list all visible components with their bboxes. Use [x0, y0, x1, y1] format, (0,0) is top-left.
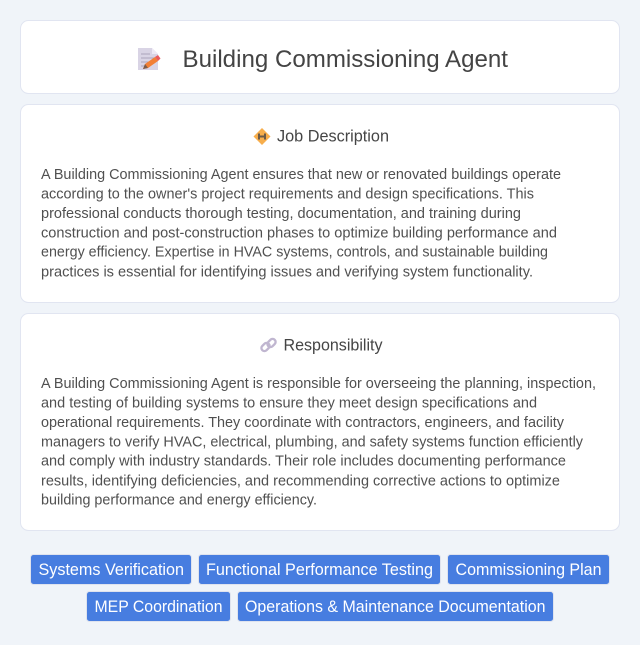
tag: MEP Coordination	[86, 592, 230, 622]
icon: chain link	[260, 338, 277, 352]
text block: job description: A Building Commissioning Agent ensures that new or renovated buildings operate	[41, 167, 561, 183]
tag: Functional Performance Testing	[198, 554, 440, 584]
text block: responsibility: managers to verify HVAC, electrical, plumbing, and safety systems function efficiently	[41, 434, 584, 450]
tag: Commissioning Plan: Commissioning Plan	[456, 561, 602, 579]
heading: responsibility: Responsibility	[284, 337, 383, 355]
text block: responsibility: building performance and energy efficiency.	[41, 492, 317, 508]
text block: responsibility	[41, 376, 596, 508]
panel: responsibility	[20, 314, 620, 530]
heading: job description: Job Description	[277, 128, 389, 146]
text block: responsibility: and comply with industry standards. Their role includes documenting performance	[41, 454, 566, 470]
icon: document with pencil	[138, 48, 160, 70]
panel: title card	[20, 20, 620, 94]
tag: Operations & Maintenance Documentation	[238, 592, 554, 622]
tag: Commissioning Plan	[448, 554, 610, 584]
tag: Operations & Maintenance Documentation: Operations & Maintenance Documentation	[245, 598, 546, 616]
text block: job description: according to the owner's project requirements and design specifications. This	[41, 186, 534, 202]
tag: Systems Verification: Systems Verification	[38, 561, 184, 579]
text block: responsibility: A Building Commissioning Agent is responsible for overseeing the planning, inspection,	[41, 376, 596, 392]
text block: job description: practices is essential for identifying issues and verifying system functionality.	[41, 264, 533, 280]
text block: job description: professional conducts thorough testing, documentation, and training during	[41, 206, 521, 222]
tag: Functional Performance Testing: Functional Performance Testing	[206, 561, 433, 579]
text block: job description: construction and post-construction phases to optimize building performance and	[41, 225, 557, 241]
text block: responsibility: operational requirements. They coordinate with contractors, engineers, and facility	[41, 415, 565, 431]
panel: job description	[20, 104, 620, 302]
text block: job description	[41, 167, 561, 280]
text block: responsibility: and testing of building systems to ensure they meet design specifications and	[41, 395, 537, 411]
text block: responsibility: results, identifying deficiencies, and recommending corrective actions to optimize	[41, 473, 560, 489]
tag: Systems Verification	[30, 554, 192, 584]
tag: MEP Coordination: MEP Coordination	[94, 598, 222, 616]
icon: orange diamond sign	[254, 128, 270, 145]
title: Building Commissioning Agent	[182, 46, 508, 73]
text block: job description: energy efficiency. Expertise in HVAC systems, controls, and sustainable building	[41, 245, 548, 261]
